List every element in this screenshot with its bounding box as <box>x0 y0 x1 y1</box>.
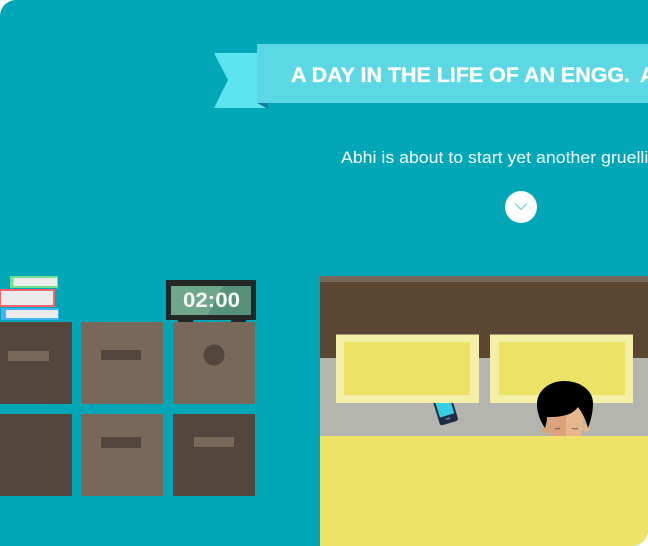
bottom-right corner <box>632 530 648 546</box>
green book <box>10 276 58 288</box>
stack of books <box>0 276 59 320</box>
red book <box>0 289 55 307</box>
mattress sheet <box>320 358 648 436</box>
intro text: Abhi is about to start yet another gruelling <box>341 148 648 167</box>
left pillow <box>336 334 479 403</box>
title ribbon <box>214 44 648 109</box>
bedroom scene <box>320 276 648 546</box>
scroll down button <box>505 191 537 223</box>
blanket <box>320 436 648 546</box>
alarm clock <box>166 280 256 323</box>
phone <box>431 389 459 426</box>
drawer 1 <box>0 322 72 404</box>
blue book <box>1 308 59 320</box>
closed eyes <box>555 428 578 429</box>
drawer 4 <box>0 414 72 496</box>
hair <box>537 381 593 428</box>
sleeping boy <box>537 381 593 437</box>
title: A DAY IN THE LIFE OF AN ENGG. <box>291 63 630 87</box>
drawer 6 <box>173 414 255 496</box>
drawer 2 <box>81 322 163 404</box>
face <box>546 408 584 437</box>
ears <box>542 424 590 434</box>
drawer 5 <box>81 414 163 496</box>
clock time: 02:00 <box>183 289 240 312</box>
right pillow <box>490 334 633 403</box>
drawer 3 <box>173 322 255 404</box>
cabinet drawers <box>0 322 255 496</box>
headboard <box>320 276 648 358</box>
